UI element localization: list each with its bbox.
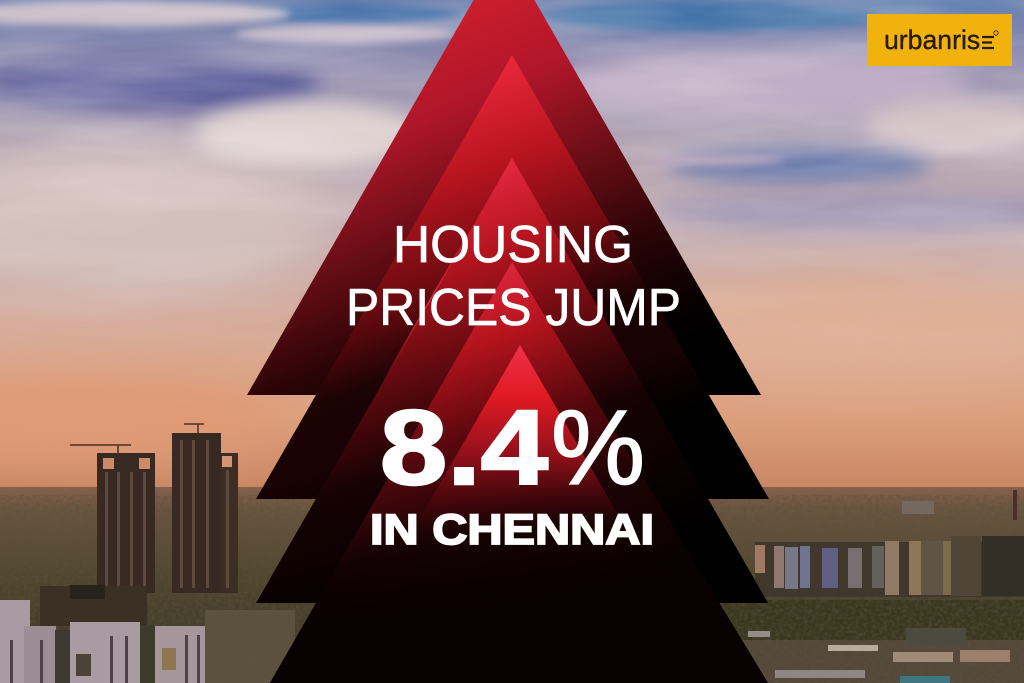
statistic: 8.4%	[380, 389, 645, 507]
statistic percent sign: %	[551, 389, 645, 507]
background: sky with clouds	[0, 0, 1024, 490]
logo: urbanrise	[867, 14, 1012, 66]
towers under construction	[70, 424, 238, 593]
stacked red triangles	[247, 0, 769, 683]
headline line 2: PRICES JUMP	[346, 279, 681, 337]
triangle 3	[256, 158, 768, 603]
dark bottom fade	[270, 262, 768, 683]
background: city ground	[0, 487, 1024, 683]
triangle 1 (top)	[247, 0, 761, 395]
logo: urbanrise: urbanrise	[884, 25, 995, 55]
headline line 1: HOUSING	[393, 216, 633, 274]
triangle 4	[270, 262, 768, 683]
triangle 5 (innermost)	[390, 345, 650, 570]
location: in Chennai: IN CHENNAI	[370, 506, 654, 554]
triangle 2	[256, 55, 769, 499]
foreground buildings, left	[0, 585, 205, 683]
edge highlight streak	[381, 222, 475, 385]
headline	[346, 216, 681, 337]
apartment blocks, right	[748, 490, 1024, 683]
statistic digits: 8.4	[380, 389, 548, 507]
